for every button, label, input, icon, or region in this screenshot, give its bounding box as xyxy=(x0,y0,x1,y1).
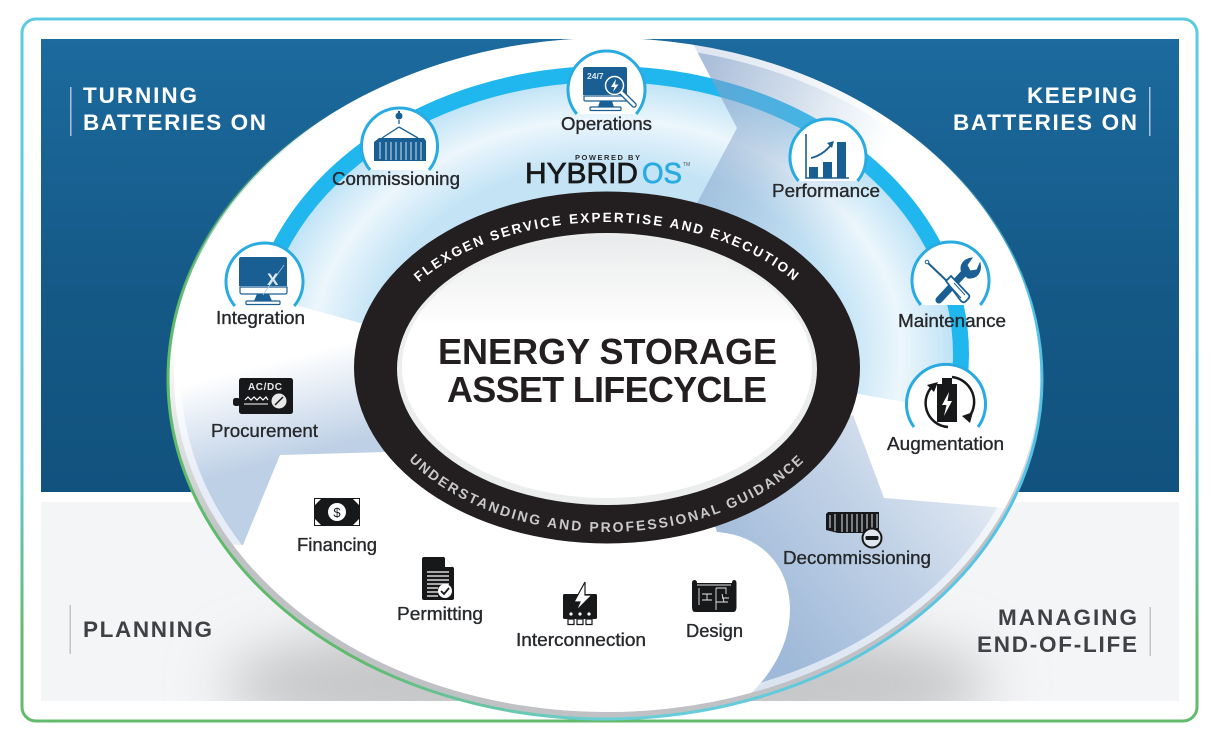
logo: HybridOS xyxy=(525,153,690,190)
sector: decommissioning shading xyxy=(715,415,1004,692)
logo: HybridOS: POWERED BY xyxy=(575,153,640,162)
icon: monitor with X: X xyxy=(267,270,279,289)
label: Design xyxy=(686,621,743,641)
label: Maintenance xyxy=(898,311,1006,331)
disc grey rim xyxy=(168,39,1042,719)
label: Augmentation xyxy=(887,434,1004,454)
heading: turning batteries on xyxy=(70,83,268,136)
logo: HybridOS: HYBRID xyxy=(525,158,638,190)
icon: document with check xyxy=(422,557,454,600)
step: design xyxy=(686,580,743,641)
label: Operations xyxy=(561,114,652,134)
sector: procurement shading xyxy=(178,353,385,545)
step: operations xyxy=(561,51,652,134)
step: performance xyxy=(772,119,880,201)
icon: wrench and screwdriver xyxy=(925,258,980,302)
blue lifecycle arc xyxy=(273,67,969,370)
icon circle xyxy=(912,242,989,305)
icon circle xyxy=(568,51,645,114)
logo: HybridOS: TM xyxy=(683,162,690,168)
heading: turning batteries on: TURNING xyxy=(83,83,199,108)
ring text: bottom: UNDERSTANDING AND PROFESSIONAL GUIDANCE xyxy=(410,454,804,532)
icon: banknote: $ xyxy=(333,505,341,520)
icon: rising bar chart xyxy=(806,134,849,178)
icon: blueprint xyxy=(692,580,736,612)
disc pale inner rim xyxy=(174,38,1040,712)
icon circle xyxy=(226,243,303,306)
disc coloured edge xyxy=(166,115,1044,720)
title xyxy=(438,331,777,410)
icon circle xyxy=(362,108,437,170)
label: Decommissioning xyxy=(783,548,931,568)
sector: keeping batteries on chevron shading xyxy=(694,45,876,246)
icon: AC/DC inverter: AC/DC xyxy=(248,382,282,393)
heading: managing end-of-life xyxy=(977,605,1151,657)
title: ASSET LIFECYCLE xyxy=(447,369,767,410)
step: interconnection xyxy=(516,582,646,650)
icon: battery with cycle arrows xyxy=(926,377,974,427)
icon: container with minus xyxy=(826,512,882,548)
label: Procurement xyxy=(211,421,318,441)
heading: managing end-of-life: END-OF-LIFE xyxy=(977,632,1139,657)
step: decommissioning xyxy=(783,512,931,568)
icon circle xyxy=(907,364,986,427)
icon: grid box with bolt xyxy=(563,582,597,624)
heading: keeping batteries on: BATTERIES ON xyxy=(953,110,1139,135)
label: Commissioning xyxy=(332,169,460,189)
step: integration xyxy=(216,243,305,328)
label: Interconnection xyxy=(516,630,646,650)
step: commissioning xyxy=(332,108,460,189)
icon: container on crane hook xyxy=(374,111,426,161)
heading: keeping batteries on xyxy=(953,83,1150,136)
ring text: top: FLEXGEN SERVICE EXPERTISE AND EXECUTION xyxy=(414,212,799,282)
icon: monitor with magnifier: 24/7 xyxy=(587,71,604,81)
heading: planning: PLANNING xyxy=(83,617,214,642)
disc white face xyxy=(174,38,1040,712)
lifecycle disc xyxy=(168,38,1042,719)
panel: navy upper background xyxy=(41,39,1179,492)
step: maintenance xyxy=(898,242,1006,331)
central ring xyxy=(354,192,860,544)
heading: managing end-of-life: MANAGING xyxy=(998,605,1139,630)
heading: keeping batteries on: KEEPING xyxy=(1027,83,1139,108)
panel: grey lower background xyxy=(41,502,1179,701)
title: ENERGY STORAGE xyxy=(438,331,777,372)
step: financing xyxy=(297,498,377,555)
step: permitting xyxy=(397,557,483,624)
icon circle xyxy=(790,119,866,181)
label: Financing xyxy=(297,535,377,555)
sector: operations light blue field xyxy=(288,84,953,402)
label: Performance xyxy=(772,181,880,201)
label: Integration xyxy=(216,308,305,328)
logo: HybridOS: OS xyxy=(642,158,682,190)
central white ellipse xyxy=(397,233,817,505)
step: augmentation xyxy=(887,364,1004,454)
step: procurement xyxy=(211,378,318,441)
label: Permitting xyxy=(397,604,483,624)
heading: turning batteries on: BATTERIES ON xyxy=(83,110,268,135)
